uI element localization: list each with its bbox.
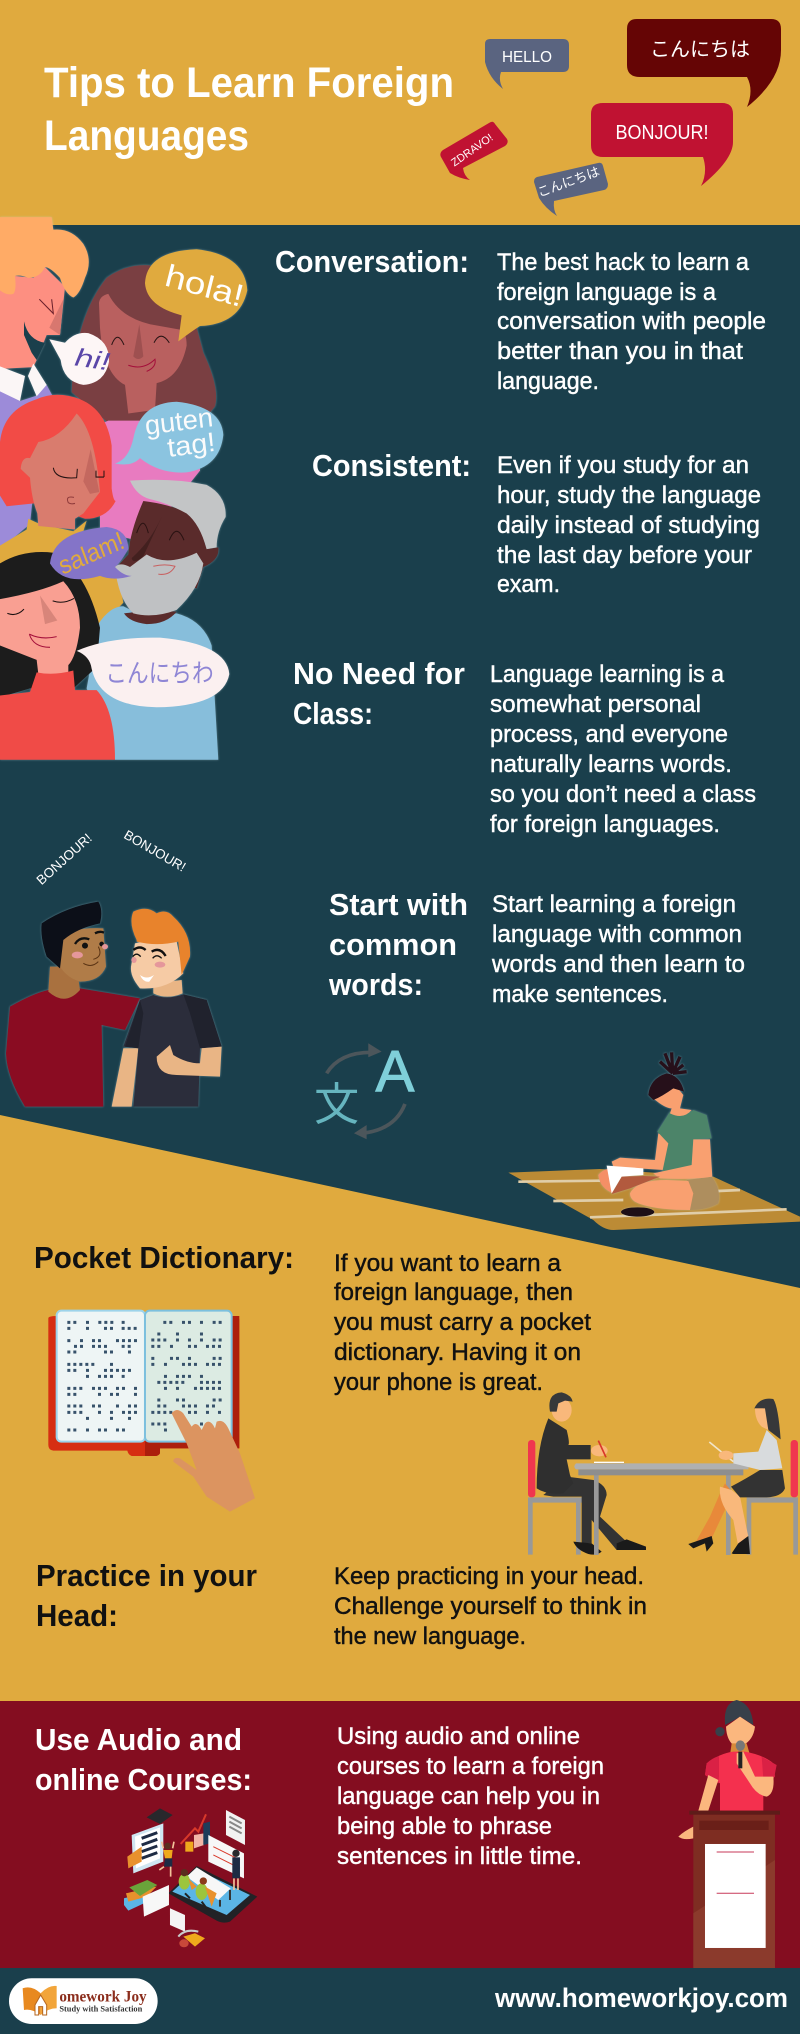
- illustration: woman speaking at podium: [678, 1700, 780, 1968]
- illustration: two friends saying bonjour: [6, 827, 415, 1139]
- person: man in suit: [537, 1392, 646, 1555]
- label: bonjour right: BONJOUR!: [121, 827, 188, 875]
- text block: Consistent: exam.: [497, 571, 560, 598]
- text block: Pocket Dictionary: If you want to learn a: [334, 1250, 562, 1277]
- text block: Start with common words: make sentences.: [492, 981, 668, 1008]
- text block: Consistent: the last day before your: [497, 542, 752, 569]
- bubble: konnichiwa: [77, 638, 229, 707]
- heading: Use Audio and online Courses: Use Audio and: [35, 1722, 242, 1757]
- person: red-haired woman: [0, 395, 123, 626]
- heading: Consistent: Consistent:: [312, 448, 471, 483]
- text block: Conversation: foreign language is a: [497, 279, 717, 306]
- heading: Use Audio and online Courses: online Courses:: [35, 1762, 252, 1797]
- chair left: [528, 1440, 583, 1555]
- logo wordmark: omework Joy: [59, 1989, 147, 2006]
- text block: Practice in your Head: [334, 1563, 647, 1650]
- hand: [172, 1410, 255, 1512]
- bubble: guten tag: tag!: [165, 426, 217, 463]
- chair right: [747, 1440, 798, 1555]
- tip 2: Consistent: [312, 448, 761, 598]
- bubble: hi: hi!: [73, 344, 112, 377]
- clipboard: [127, 1808, 173, 1873]
- tip 1: Conversation: [275, 244, 766, 395]
- cheering woman: [159, 1842, 174, 1877]
- speech bubbles header: [440, 19, 781, 216]
- podium: [689, 1811, 780, 1968]
- bubble: konnichiwa dark: こんにちは: [650, 39, 750, 61]
- tip 3: No Need for Class: [293, 656, 756, 838]
- text block: No Need for Class: so you don’t need a class: [490, 781, 756, 808]
- person: black-haired woman: [0, 552, 115, 760]
- panel: teal section background: [0, 225, 800, 1288]
- speaker: [678, 1700, 777, 1839]
- person: brown-haired woman: [72, 265, 216, 542]
- heading: Start with common words: Start with: [329, 887, 468, 922]
- heading: Conversation: Conversation:: [275, 244, 469, 279]
- text block: Consistent: daily instead of studying: [497, 512, 760, 539]
- bubble: HELLO: [485, 39, 569, 89]
- bubble: BONJOUR: [591, 103, 733, 186]
- documents: [170, 1810, 245, 1932]
- text block: Use Audio and online Courses: sentences in little time.: [337, 1843, 582, 1870]
- text block: Practice in your Head: Keep practicing in your head.: [334, 1563, 644, 1590]
- tip 5: Pocket Dictionary: [34, 1240, 591, 1396]
- text block: Pocket Dictionary: you must carry a pocket: [334, 1309, 591, 1336]
- text block: Start with common words: language with common: [492, 921, 742, 948]
- bubble: konnichiwa: こんにちわ: [105, 659, 214, 688]
- logo: Homework Joy: [9, 1978, 158, 2024]
- text block: Start with common words: Start learning a foreign: [492, 891, 736, 918]
- person: blond man: [0, 217, 89, 549]
- tablet classroom: [168, 1866, 257, 1923]
- panel: footer background: [0, 1968, 800, 2034]
- title: Languages: [44, 112, 249, 160]
- heading: No Need for Class: Class:: [293, 696, 373, 731]
- illustration: online learning isometric: [124, 1808, 257, 1947]
- logo tagline: Study with Satisfaction: [59, 2004, 142, 2014]
- bubble: ZDRAVO: [440, 122, 508, 180]
- tip 7: Use Audio and online Courses: [35, 1722, 604, 1870]
- bubble: hola: [145, 249, 247, 341]
- text block: No Need for Class: for foreign languages.: [490, 811, 720, 838]
- icon: translate: A: [376, 1040, 415, 1105]
- text block: Pocket Dictionary: your phone is great.: [334, 1369, 543, 1396]
- person: dark-haired man: [6, 902, 140, 1107]
- footer url: www.homeworkjoy.com: [494, 1983, 788, 2013]
- braille dots: [67, 1322, 222, 1430]
- bubble: konnichiwa dark: [627, 19, 781, 107]
- text block: Conversation: better than you in that: [497, 338, 743, 365]
- heading: Practice in your Head: Head:: [36, 1598, 118, 1633]
- icon: translate: [314, 1040, 415, 1139]
- person: woman in skirt: [688, 1399, 785, 1554]
- bubble: guten tag: guten: [143, 401, 215, 441]
- text block: Use Audio and online Courses: language can help you in: [337, 1783, 600, 1810]
- text block: Start with common words: [491, 891, 745, 1008]
- icon: translate: 文: [314, 1079, 359, 1130]
- person: bearded man: [87, 480, 226, 760]
- book pages: [57, 1311, 232, 1442]
- growth chart: [181, 1814, 210, 1852]
- books: [124, 1880, 169, 1917]
- text block: Conversation: language.: [497, 368, 599, 395]
- tip 6: Practice in your Head: [36, 1558, 647, 1650]
- text block: No Need for Class: [490, 661, 756, 838]
- text block: No Need for Class: Language learning is a: [490, 661, 725, 688]
- text block: Consistent: [497, 452, 761, 598]
- text block: No Need for Class: naturally learns words.: [490, 751, 732, 778]
- heading: Use Audio and online Courses: [35, 1722, 252, 1797]
- heading: No Need for Class: [293, 656, 465, 731]
- mat: [508, 1169, 800, 1230]
- text block: Use Audio and online Courses: Using audio and online: [337, 1723, 580, 1750]
- label: bonjour left: BONJOUR!: [33, 831, 95, 888]
- heading: Start with common words: [328, 887, 468, 1002]
- text block: Start with common words: words and then learn to: [491, 951, 745, 978]
- title: Tips to Learn Foreign: [44, 59, 454, 107]
- text block: Pocket Dictionary: dictionary. Having it on: [334, 1339, 581, 1366]
- icon: book logo: [23, 1986, 57, 2015]
- text block: Conversation: The best hack to learn a: [497, 249, 750, 276]
- illustration: people greeting in many languages: [0, 217, 247, 760]
- heading: No Need for Class: No Need for: [293, 656, 465, 691]
- bubble: HELLO: HELLO: [502, 49, 552, 66]
- bubble: BONJOUR: BONJOUR!: [616, 122, 708, 144]
- person: reader: [598, 1052, 719, 1217]
- bubble: hola: hola!: [162, 258, 247, 314]
- illustration: braille book with hand: [48, 1311, 255, 1512]
- book cover: [48, 1316, 239, 1456]
- presenter: [232, 1850, 240, 1890]
- title: [44, 59, 454, 160]
- table: [574, 1462, 749, 1555]
- bubble: konnichiwa small: こんにちは: [535, 164, 602, 200]
- text block: Pocket Dictionary: foreign language, then: [334, 1279, 573, 1306]
- bubble: konnichiwa small: [534, 163, 608, 216]
- bubble: guten tag: [115, 401, 223, 473]
- text block: No Need for Class: process, and everyone: [490, 721, 728, 748]
- headphones and book: [178, 1931, 205, 1947]
- text block: Consistent: Even if you study for an: [497, 452, 749, 479]
- heading: Pocket Dictionary: Pocket Dictionary:: [34, 1240, 294, 1275]
- text block: Conversation: [497, 249, 766, 395]
- bubble: ZDRAVO: ZDRAVO!: [449, 132, 495, 169]
- bubble: hi: [49, 333, 112, 385]
- text block: Practice in your Head: Challenge yourself to think in: [334, 1593, 647, 1620]
- text block: Conversation: conversation with people: [497, 308, 766, 335]
- text block: No Need for Class: somewhat personal: [490, 691, 701, 718]
- illustration: woman reading on a mat: [508, 1052, 800, 1230]
- person: red-haired man: [112, 909, 222, 1107]
- illustration: two people meeting at a table: [528, 1392, 798, 1555]
- heading: Start with common words: words:: [328, 967, 423, 1002]
- text block: Use Audio and online Courses: courses to learn a foreign: [337, 1753, 604, 1780]
- tip 4: Start with common words: [328, 887, 745, 1008]
- text block: Use Audio and online Courses: being able to phrase: [337, 1813, 552, 1840]
- panel: maroon section background: [0, 1701, 800, 1968]
- heading: Practice in your Head: Practice in your: [36, 1558, 257, 1593]
- text block: Pocket Dictionary: [334, 1250, 591, 1396]
- bubble: salam: salam!: [55, 526, 128, 581]
- heading: Start with common words: common: [329, 927, 457, 962]
- text block: Practice in your Head: the new language.: [334, 1623, 526, 1650]
- text block: Consistent: hour, study the language: [497, 482, 761, 509]
- text block: Use Audio and online Courses: [337, 1723, 604, 1870]
- heading: Practice in your Head: [36, 1558, 257, 1633]
